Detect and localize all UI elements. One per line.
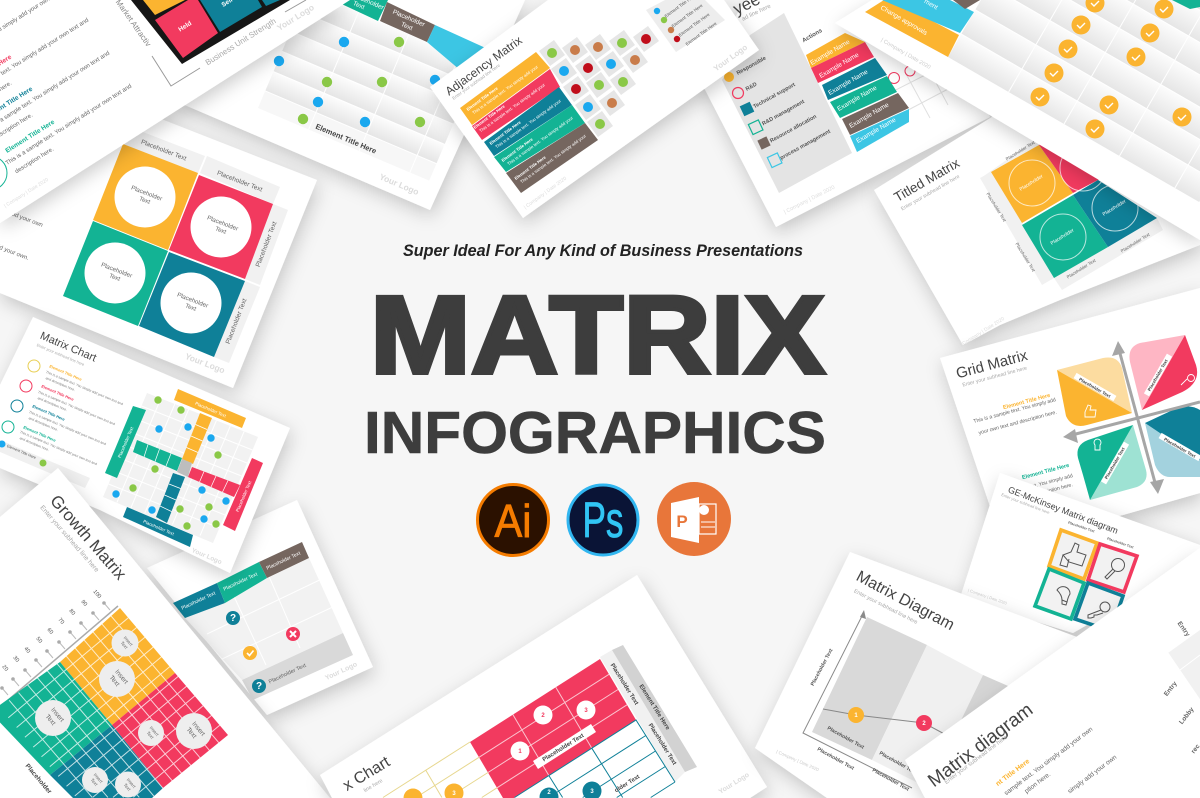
panel: GE-McKinsey matrix: Placeholder Text (1107, 537, 1135, 550)
check dots (1030, 0, 1192, 138)
chart legend items: This is a sample text. You simply add your own text and (37, 390, 116, 426)
panel: GE-McKinsey matrix: Placeholder Text (1068, 521, 1096, 534)
chart grid: Placeholder Text (194, 401, 228, 419)
number markers: 1 (518, 749, 522, 755)
panel: growth matrix (0, 468, 330, 798)
panel: growth matrix: Insert (123, 635, 134, 648)
panel: bottom centre chart: Placeholder Text (647, 723, 677, 766)
right strips (600, 645, 697, 782)
quadrants: Text (214, 225, 227, 236)
chart grid (103, 389, 263, 547)
growth bubbles (35, 630, 212, 798)
market text blocks: description here. (14, 146, 55, 175)
petal labels: Placeholder Text (1104, 446, 1126, 480)
panel: titled matrix: | Company | Date 2020 (959, 316, 1006, 348)
panel: matrix diagram: Matrix Diagram (853, 568, 957, 634)
panel: matrix diagram lower right (905, 548, 1200, 798)
number markers: 3 (590, 789, 594, 795)
growth axis: 100 (92, 589, 102, 600)
panel: matrix diagram (755, 552, 1085, 798)
icon: Photoshop (568, 485, 638, 555)
GE icons (1057, 543, 1124, 618)
strip labels: Placeholder Text (225, 298, 249, 345)
titled matrix quadrants: Placeholder (1050, 227, 1076, 247)
chart legend items: Element Title Here (6, 444, 37, 460)
panel: bottom centre chart (320, 575, 767, 798)
panel: grid matrix: Enter your subhead line here (962, 365, 1028, 389)
panel: matrix diagram: Placeholder Text (826, 726, 865, 751)
grid text blocks: ription here. (1045, 482, 1074, 495)
icon: PowerPoint: P (676, 512, 688, 531)
employee legend (724, 56, 832, 168)
tagline: Super Ideal For Any Kind of Business Presentations (403, 241, 803, 260)
header cells (865, 0, 1200, 57)
strip labels (140, 139, 279, 345)
panel: market attractiveness matrix: | Company | Date 2020 (3, 177, 50, 209)
market text blocks: This is a sample text. You simply add your own text and (5, 84, 133, 167)
employee legend: Responsible (736, 56, 767, 77)
panel: adjacency matrix: Enter your subhead line here (451, 62, 501, 101)
chart grid: Placeholder Text (117, 425, 135, 459)
number markers (404, 700, 602, 798)
title: MATRIX: MATRIX (370, 274, 825, 397)
chart legend items: and description here. (37, 396, 68, 412)
panel: employee matrix (700, 0, 990, 227)
dot grid header: Placeholder (391, 9, 427, 29)
lower right text: sample text. You simply add your own (1003, 726, 1095, 797)
petal labels: Placeholder Text (1163, 437, 1197, 459)
panel: growth matrix: Placeholder (24, 763, 53, 796)
strip labels: Placeholder Text (216, 170, 263, 194)
quadrants: Placeholder (100, 261, 133, 280)
adjacency legend (646, 0, 725, 52)
adjacency stripes: Element Title Here (473, 103, 506, 130)
adjacency stripes: This is a sample text. You simply add your (519, 133, 587, 184)
adjacency stripes: This is a sample text. You simply add your (506, 115, 574, 166)
panel: employee matrix: Actions (801, 28, 824, 44)
employee stripes: Example Name (818, 51, 861, 80)
panel: titled matrix: Titled Matrix (891, 155, 962, 205)
status icons: ? (230, 613, 236, 624)
panel: titled matrix (874, 110, 1200, 348)
adjacency stripes: Element Title Here (514, 154, 547, 181)
panel: matrix chart: Your Logo (190, 547, 223, 566)
employee legend: Technical support (753, 82, 797, 110)
petal labels: Placeholder Text (1147, 358, 1169, 392)
panel: matrix diagram: Placeholder Text (810, 648, 835, 687)
employee stripes: Example Name (827, 68, 870, 97)
panel: bottom centre chart: x Chart (340, 753, 394, 795)
panel: grid matrix: Grid Matrix (954, 347, 1030, 382)
panel: middle left table (147, 500, 373, 715)
employee legend: R&D management (761, 99, 806, 127)
panel: growth matrix: Insert (113, 669, 129, 686)
grid text blocks: This is a sample text. You simply add (973, 397, 1057, 425)
panel: titled matrix: Enter your subhead line here (900, 174, 961, 212)
panel: middle left table: Placeholder Text (268, 663, 308, 685)
employee legend: process management (779, 129, 832, 161)
growth axis (0, 589, 118, 707)
panel: employee matrix: ad line here (741, 3, 773, 23)
panel: market attractiveness matrix: Your Logo (275, 2, 316, 33)
lower right table: Lobby (1178, 706, 1196, 726)
petal labels: Placeholder Text (1078, 377, 1112, 399)
adjacency stripes: This is a sample text. You simply add your (471, 64, 539, 115)
panel: four circle quadrant matrix: add your own (8, 210, 43, 229)
grid text blocks: xt. You simply add (1032, 473, 1074, 490)
employee stripes: Example Name (836, 84, 879, 113)
panel: grid matrix (940, 288, 1200, 545)
quadrants: Placeholder (130, 184, 163, 203)
adjacency stripes: Element Title Here (501, 136, 534, 163)
grid text blocks: your own text and description here. (978, 410, 1058, 436)
icon: PowerPoint (657, 482, 731, 556)
dot grid header: Text (400, 21, 414, 32)
diagram trend: 1 (854, 713, 858, 719)
panel: GE-McKinsey matrix: Enter your subhead line here (1001, 492, 1051, 515)
panel: growth matrix: Text (90, 777, 99, 787)
adjacency stripes: This is a sample text. You simply add your (494, 98, 562, 149)
grid text blocks: Element Title Here (1002, 393, 1051, 411)
status icons (226, 611, 300, 693)
side strips (123, 127, 288, 363)
titled matrix quadrants: Placeholder (1102, 198, 1128, 218)
petal icons (1085, 375, 1195, 450)
panel: market attractiveness matrix (0, 0, 350, 223)
panel: matrix diagram: Enter your subhead line here (853, 588, 918, 626)
panel: adjacency matrix: Your Logo (712, 43, 749, 73)
employee stripes: Example Name (848, 101, 891, 130)
titled matrix quadrants (991, 110, 1157, 278)
chart grid: Placeholder Text (142, 519, 176, 537)
chart legend items: This is a sample text. You simply add your own text and (28, 410, 107, 446)
chart legend items (0, 360, 124, 488)
chart legend items: Element Title Here (41, 384, 75, 402)
adjacency dots (547, 34, 651, 129)
adjacency legend: Element Title Here (685, 21, 718, 47)
growth axis: 80 (67, 608, 76, 617)
title: INFOGRAPHICS: INFOGRAPHICS (364, 400, 826, 466)
table header (173, 542, 309, 618)
quadrants: Text (184, 302, 197, 313)
teal and yellow grids (383, 720, 675, 798)
adjacency stripes: Element Title Here (489, 119, 522, 146)
panel: dot grid matrix: Your Logo (378, 171, 420, 197)
adjacency legend: Element Title Here (671, 3, 704, 29)
dot grid rows (203, 0, 479, 181)
check grid rows (948, 0, 1200, 202)
panel: four circle quadrant matrix (0, 56, 317, 388)
panel: matrix diagram: | Company | Date 2020 (776, 749, 820, 772)
panel: matrix chart: Matrix Chart (38, 330, 98, 364)
panel: titled matrix: Placeholder Text (985, 192, 1008, 223)
lower right table (1163, 620, 1200, 755)
chart legend items: This is a sample text. You simply add your own text and (45, 370, 124, 406)
panel: growth matrix: Insert (149, 725, 160, 738)
chart legend items: and description here. (28, 416, 59, 432)
axis arrows (1063, 341, 1200, 494)
panel: growth matrix: Insert (126, 777, 137, 790)
diagram trend (823, 707, 950, 737)
panel: bottom centre chart: older Text (614, 774, 641, 794)
quadrants: Text (108, 272, 121, 283)
chart legend items: This is a sample text. You simply add your own text and (19, 430, 98, 466)
table header: Placeholder Text (181, 590, 217, 612)
chart legend items: Element Title Here (49, 364, 83, 382)
number markers: 3 (452, 791, 456, 797)
panel: GE-McKinsey matrix: GE-McKinsey Matrix diagram (1007, 485, 1119, 536)
employee legend: R&D (745, 82, 758, 93)
panel: adjacency matrix: Adjacency Matrix (443, 33, 525, 98)
icon: Photoshop: Ps (582, 492, 624, 548)
lower right text: ption here. (1023, 771, 1052, 795)
diagram columns (812, 617, 1040, 798)
panel: bottom centre chart: Element Title Here (637, 684, 671, 732)
panel: middle left table: Your Logo (324, 661, 358, 682)
status icons: ? (256, 681, 262, 692)
panel: matrix diagram: Placeholder Text (871, 768, 910, 793)
panel: dot grid matrix (180, 0, 525, 210)
diagram trend: 2 (922, 721, 926, 727)
panel: four circle quadrant matrix: Your Logo (184, 351, 226, 375)
GE quadrants (1035, 530, 1137, 631)
panel: matrix chart (0, 317, 290, 573)
panel: matrix diagram: Placeholder Text (878, 751, 917, 776)
panel: titled matrix: Placeholder Text (1120, 231, 1151, 254)
panel: bottom centre chart: Placeholder Text (609, 663, 639, 706)
chart dots (112, 396, 230, 530)
market text blocks: Element Title Here (4, 119, 56, 155)
growth axis: 50 (34, 636, 43, 645)
red block (470, 659, 636, 798)
market text blocks (0, 0, 133, 175)
market matrix: Held (177, 20, 193, 33)
adjacency stripes: Element Title Here (466, 85, 499, 112)
market matrix (131, 0, 290, 64)
panel: growth matrix: Text (146, 730, 155, 740)
titled matrix quadrants: Placeholder (1019, 173, 1045, 193)
panel: growth matrix: Text (120, 640, 129, 650)
growth axis: 40 (22, 646, 31, 655)
lower right table: Entry (1176, 620, 1191, 638)
growth axis: 90 (79, 599, 88, 608)
panel: titled matrix: Placeholder Text (1014, 242, 1037, 273)
petals (1057, 335, 1200, 500)
quadrants: Placeholder (206, 214, 239, 233)
panel: titled matrix: Placeholder Text (1066, 257, 1097, 280)
lower right text: simply add your own (1067, 754, 1119, 795)
panel: bottom centre chart: Placeholder Text (542, 733, 585, 763)
employee legend: Resource allocation (769, 114, 818, 144)
strip labels: Placeholder Text (255, 221, 279, 268)
panel: matrix diagram lower right: Matrix diagram (924, 699, 1037, 792)
diagram axes (803, 610, 912, 788)
panel: growth matrix: Insert (49, 707, 65, 724)
growth axis: 30 (11, 655, 20, 664)
panel: bottom centre chart: Your Logo (718, 772, 751, 796)
table header: Placeholder Text (266, 550, 302, 572)
panel: bottom centre chart: line here (363, 778, 384, 794)
dot grid header (333, 0, 490, 70)
dots (274, 37, 440, 127)
panel: growth matrix: Text (108, 674, 121, 688)
icon: Illustrator (478, 484, 548, 556)
adjacency legend: Element Title Here (678, 12, 711, 38)
quadrants (63, 144, 273, 357)
panel: adjacency matrix: | Company | Date 2020 (523, 176, 568, 211)
employee stripes: Example Name (809, 38, 852, 67)
panel: growth matrix: Growth Matrix (46, 491, 130, 584)
quadrants: Placeholder (176, 291, 209, 310)
panel: top right check matrix (835, 0, 1200, 240)
panel: employee matrix: | Company | Date 2020 (783, 185, 836, 216)
number markers: 2 (541, 713, 545, 719)
adjacency tiles (539, 26, 659, 137)
adjacency stripes (460, 52, 598, 193)
panel: growth matrix: Text (185, 726, 198, 740)
strip labels: Placeholder Text (140, 139, 187, 163)
chart legend items: Element Title Here (32, 404, 66, 422)
quadrants: Text (138, 195, 151, 206)
petal labels (1074, 354, 1200, 484)
grid text blocks (973, 393, 1074, 495)
panel: dot grid matrix: Element Title Here (314, 122, 378, 156)
growth axis: 20 (0, 664, 9, 673)
panel: market attractiveness matrix: Business Unit Strength (204, 17, 278, 67)
lower right text: nt Title Here (995, 758, 1031, 788)
panel: growth matrix: Insert (93, 772, 104, 785)
panel: growth matrix: Text (123, 782, 132, 792)
number markers: 2 (547, 790, 551, 796)
chart legend items: and description here. (45, 376, 76, 392)
chart legend items: Element Title Here (23, 425, 57, 443)
chart grid: Placeholder Text (235, 479, 253, 513)
panel: titled matrix: Placeholder Text (1005, 139, 1036, 162)
growth axis: 60 (45, 627, 54, 636)
panel: adjacency matrix (430, 0, 759, 218)
panel: top right check matrix: | Company | Date 2020 (880, 37, 931, 71)
panel: growth matrix: Text (44, 713, 57, 727)
panel: GE-McKinsey matrix (960, 473, 1200, 633)
panel: matrix diagram lower right: Enter your subhead line here (944, 734, 1009, 786)
employee stripes: Example Name (855, 116, 898, 145)
grid text blocks: Element Title Here (1021, 463, 1070, 481)
panel: matrix chart: Enter your subhead line here (36, 342, 86, 367)
growth axis: 70 (56, 617, 65, 626)
adjacency stripes: This is a sample text. You simply add your (478, 82, 546, 133)
table header: Placeholder Text (223, 571, 259, 593)
employee stripes (806, 33, 909, 152)
panel: matrix diagram: Placeholder Text (816, 747, 855, 772)
icon: Illustrator: Ai (494, 495, 532, 547)
panel: growth matrix: Enter your subhead line here (38, 504, 100, 574)
number markers: 3 (584, 708, 588, 714)
chart legend items: and description here. (19, 436, 50, 452)
panel: GE-McKinsey matrix: | Company | Date 2020 (967, 588, 1008, 606)
panel: growth matrix: Insert (190, 721, 206, 738)
growth quadrants (0, 608, 228, 798)
lower right table: Entry (1163, 680, 1179, 698)
header cells: Change approvals (879, 4, 929, 37)
dot grid header: Text (352, 0, 366, 11)
